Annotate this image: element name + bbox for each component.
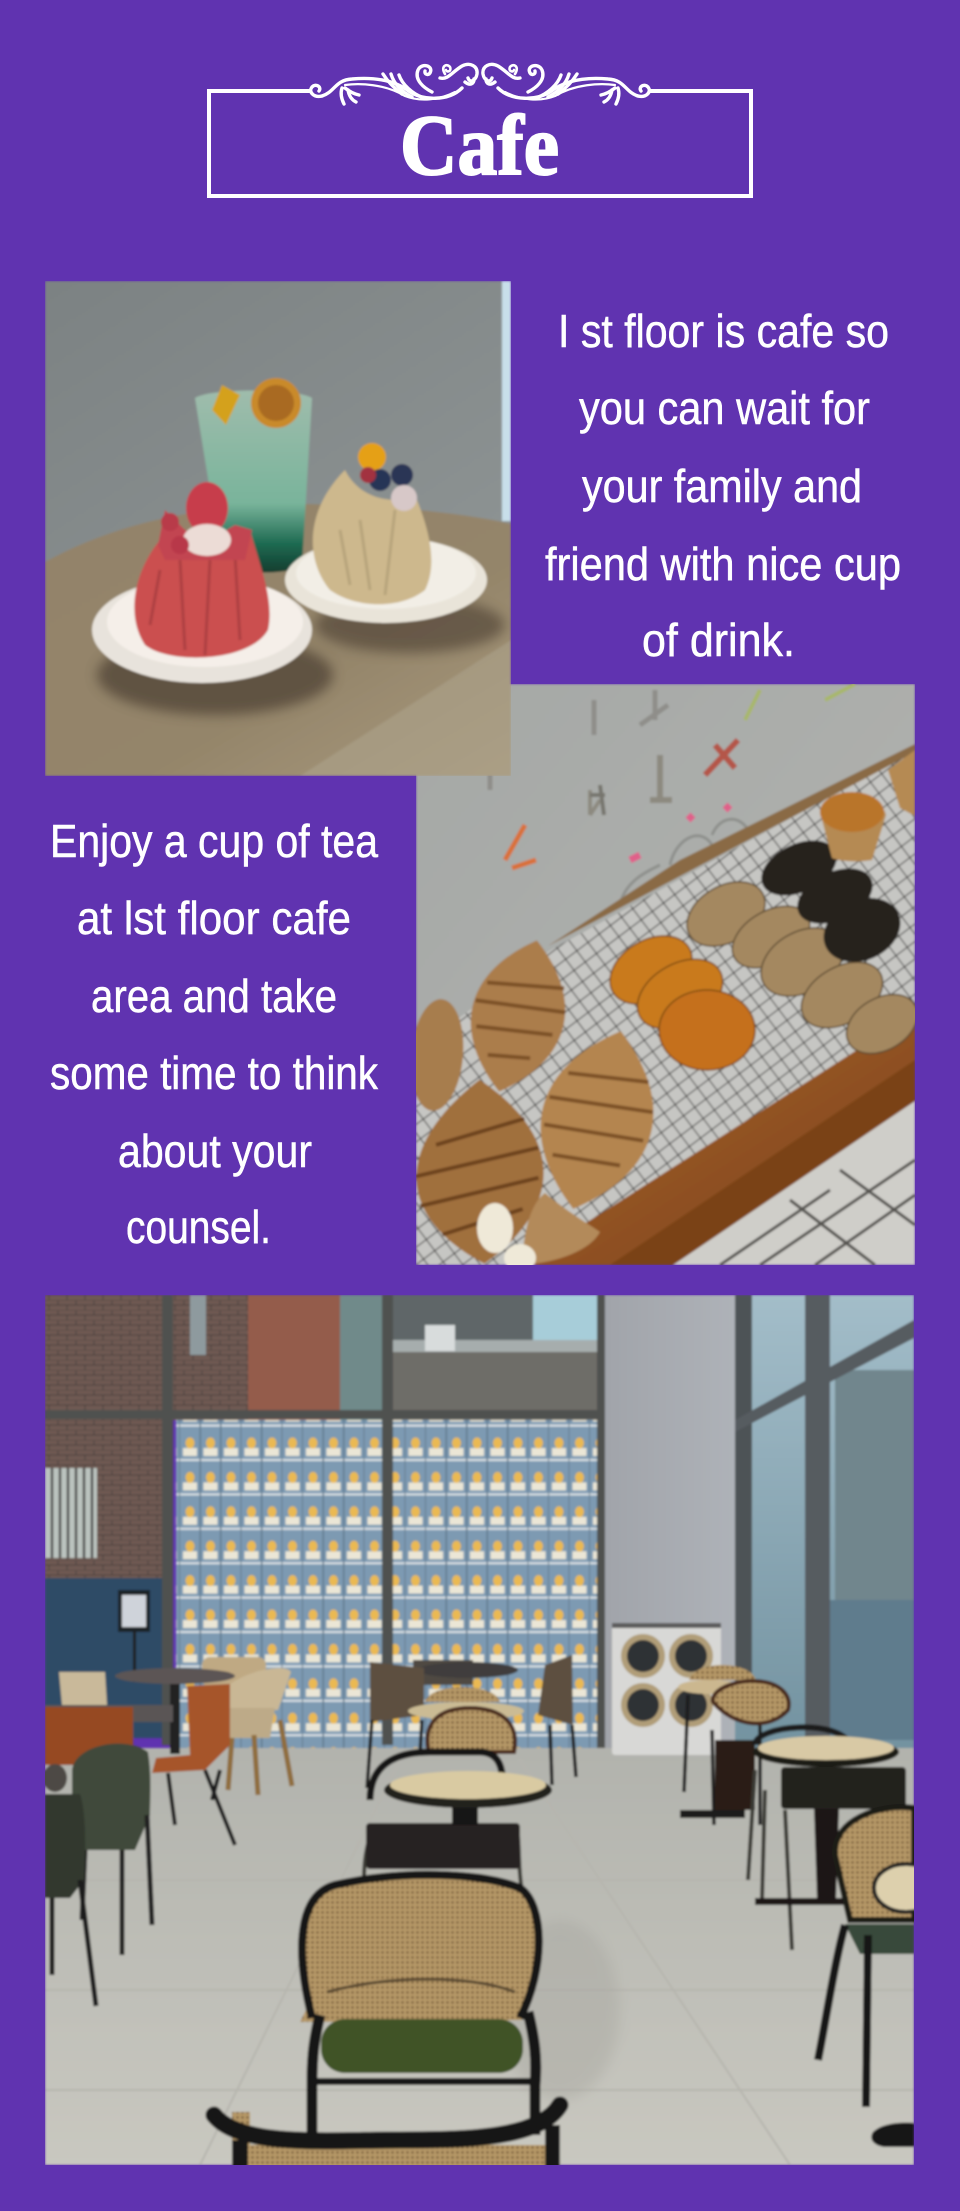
centre table and dark chair — [364, 1752, 552, 1890]
lower corner rack — [673, 1101, 915, 1265]
hanging lettering marks — [490, 684, 855, 905]
text: enjoy a cup of tea note: area and take — [91, 970, 337, 1022]
reflection upper panels — [170, 1295, 250, 1420]
floor — [45, 1748, 914, 2165]
photo: baked goods on wire rack — [406, 684, 928, 1272]
brick wall mid left — [45, 1418, 164, 1580]
text: first floor cafe note: your family and — [582, 460, 862, 512]
text: enjoy a cup of tea note — [50, 815, 379, 1253]
concrete wall — [416, 684, 915, 1028]
wood tray rim top — [548, 744, 915, 946]
text: first floor cafe note — [545, 305, 901, 666]
text: enjoy a cup of tea note: at lst floor cafe — [77, 892, 351, 944]
orange cookies — [608, 934, 758, 1072]
text: first floor cafe note: friend with nice cup — [545, 538, 901, 590]
wire rack — [416, 750, 915, 1265]
wall — [45, 281, 511, 581]
red dessert — [134, 530, 270, 658]
glass of green soda — [195, 390, 312, 572]
plate shadows — [97, 635, 333, 715]
sign stand — [118, 1590, 150, 1632]
croissant bottom left — [416, 1078, 545, 1265]
text: first floor cafe note: you can wait for — [579, 382, 870, 434]
white plate — [92, 577, 312, 683]
grey column — [605, 1295, 735, 1765]
photo: desserts and drink — [45, 281, 511, 776]
title text: Cafe — [400, 97, 559, 193]
title frame — [209, 91, 751, 196]
croissant lower — [523, 1193, 600, 1265]
left seating group — [43, 1657, 292, 2006]
croissant left — [416, 998, 465, 1112]
wood frame — [520, 1013, 915, 1265]
round table — [45, 504, 511, 776]
cream plate — [285, 537, 487, 623]
dark cookies — [760, 839, 902, 964]
text: first floor cafe note: I st floor is cafe so — [558, 305, 889, 357]
text: first floor cafe note: of drink. — [642, 614, 795, 666]
window strip — [502, 281, 511, 521]
cream dessert — [313, 470, 431, 604]
text: enjoy a cup of tea note: some time to think — [50, 1047, 379, 1099]
lens flare — [477, 1203, 513, 1253]
rear centre seating group — [367, 1655, 576, 1788]
right windows — [735, 1295, 914, 1785]
croissant top — [470, 940, 567, 1092]
text: enjoy a cup of tea note: counsel. — [126, 1201, 271, 1253]
barred window — [45, 1468, 97, 1558]
text: enjoy a cup of tea note: about your — [118, 1125, 312, 1177]
front rattan chair — [300, 1875, 539, 2135]
right seating group — [678, 1665, 938, 2147]
air purifier — [612, 1623, 721, 1755]
window mullions — [45, 1295, 605, 1755]
tarts — [821, 810, 887, 863]
blue lower wall — [45, 1578, 165, 1738]
bottom foreground chair — [214, 2105, 560, 2170]
photo: cafe interior — [43, 1295, 938, 2170]
ornament flourish — [311, 64, 649, 104]
candle display grid — [176, 1420, 600, 1755]
croissant centre — [539, 1030, 655, 1210]
text: enjoy a cup of tea note: Enjoy a cup of tea — [50, 815, 378, 867]
brick wall top left — [45, 1295, 170, 1420]
tan cookies — [685, 880, 915, 1055]
title block — [209, 64, 751, 196]
